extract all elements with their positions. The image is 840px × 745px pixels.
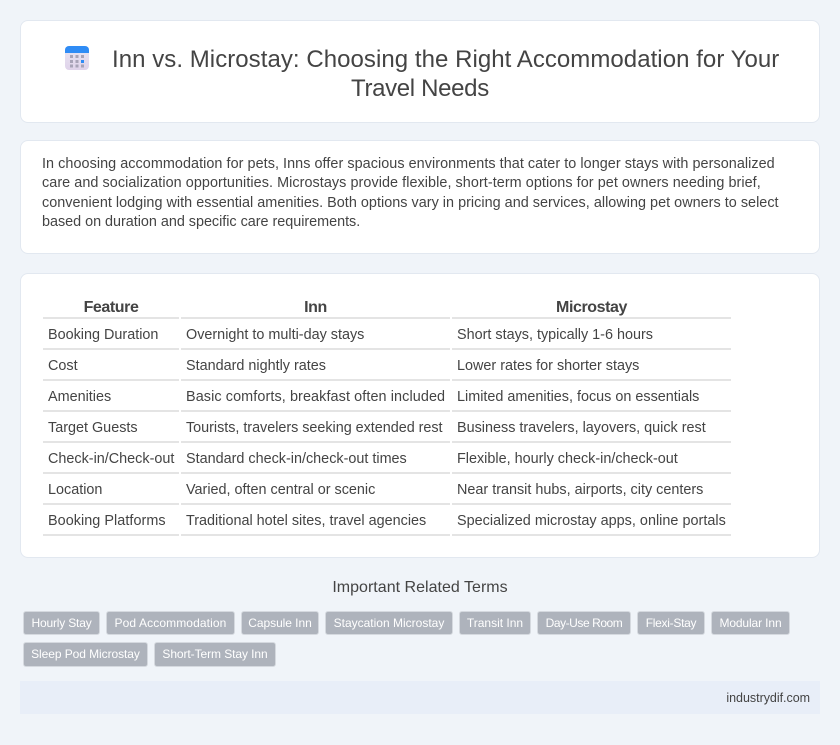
row: Check-in/Check-out: Check-in/Check-out bbox=[48, 451, 174, 467]
tag: Day-Use Room bbox=[537, 611, 631, 635]
tag: Staycation Microstay bbox=[325, 611, 453, 635]
row: Check-in/Check-out: Standard check-in/check-out times bbox=[186, 451, 407, 467]
row: Target Guests: Target Guests bbox=[48, 420, 138, 436]
row: Amenities bbox=[43, 389, 731, 412]
tag: Sleep Pod Microstay: Sleep Pod Microstay bbox=[31, 647, 140, 661]
text block: introduction: In choosing accommodation for pets, Inns offer spacious environments that cater to longer stays with personalized bbox=[42, 156, 775, 172]
panel: title header bbox=[20, 20, 820, 123]
row: Location bbox=[43, 482, 731, 505]
text block: introduction: convenient lodging with essential amenities. Both options vary in pricing and services, allowing pet owners to select bbox=[42, 195, 779, 211]
row: Target Guests: Tourists, travelers seeking extended rest bbox=[186, 420, 443, 436]
row: Amenities: Amenities bbox=[48, 389, 111, 405]
row: Check-in/Check-out: Flexible, hourly check-in/check-out bbox=[457, 451, 678, 467]
table header: Inn bbox=[304, 299, 327, 316]
row: Cost bbox=[43, 358, 731, 381]
tag: Short-Term Stay Inn bbox=[154, 642, 276, 667]
row: Cost: Lower rates for shorter stays bbox=[457, 358, 639, 374]
text block: introduction: care and socialization opportunities. Microstays provide flexible, short-term options for pet owners needing brief, bbox=[42, 175, 761, 191]
tag: Flexi-Stay: Flexi-Stay bbox=[646, 616, 696, 630]
row: Location: Near transit hubs, airports, city centers bbox=[457, 482, 703, 498]
tag: Sleep Pod Microstay bbox=[23, 642, 148, 667]
tag: Short-Term Stay Inn: Short-Term Stay Inn bbox=[162, 647, 268, 661]
comparison table bbox=[43, 299, 731, 536]
row: Amenities: Limited amenities, focus on essentials bbox=[457, 389, 699, 405]
row: Booking Platforms: Booking Platforms bbox=[48, 513, 166, 529]
table header: Feature bbox=[84, 299, 138, 316]
footer credit: industrydif.com bbox=[726, 691, 810, 705]
tag: Flexi-Stay bbox=[637, 611, 705, 635]
row: Booking Duration: Overnight to multi-day stays bbox=[186, 327, 364, 343]
tag: Capsule Inn bbox=[241, 611, 319, 635]
tag: Pod Accommodation: Pod Accommodation bbox=[115, 616, 226, 630]
tag: Hourly Stay bbox=[23, 611, 100, 635]
row: Target Guests: Business travelers, layovers, quick rest bbox=[457, 420, 706, 436]
table header bbox=[43, 299, 731, 319]
icon: calendar bbox=[65, 46, 89, 70]
tag: Transit Inn: Transit Inn bbox=[467, 616, 523, 630]
tag: Transit Inn bbox=[459, 611, 531, 635]
tag: Day-Use Room: Day-Use Room bbox=[546, 616, 622, 630]
text block: introduction: based on duration and specific care requirements. bbox=[42, 214, 360, 230]
table header: Microstay bbox=[556, 299, 627, 316]
row: Check-in/Check-out bbox=[43, 451, 731, 474]
title: Inn vs. Microstay: Choosing the Right Accommodation for Your bbox=[112, 46, 779, 73]
title bbox=[112, 46, 779, 102]
tag: Modular Inn: Modular Inn bbox=[719, 616, 782, 630]
row: Booking Platforms bbox=[43, 513, 731, 536]
tag: Pod Accommodation bbox=[106, 611, 235, 635]
row: Location: Location bbox=[48, 482, 102, 498]
row: Target Guests bbox=[43, 420, 731, 443]
row: Booking Duration: Short stays, typically 1-6 hours bbox=[457, 327, 653, 343]
heading: related terms: Important Related Terms bbox=[332, 579, 508, 596]
tag: Staycation Microstay: Staycation Microstay bbox=[334, 616, 444, 630]
row: Booking Platforms: Specialized microstay apps, online portals bbox=[457, 513, 726, 529]
tag: Hourly Stay: Hourly Stay bbox=[31, 616, 92, 630]
row: Amenities: Basic comforts, breakfast often included bbox=[186, 389, 445, 405]
row: Booking Duration bbox=[43, 327, 731, 350]
panel: introduction bbox=[20, 140, 820, 254]
tag: Modular Inn bbox=[711, 611, 790, 635]
panel: comparison table bbox=[20, 273, 820, 558]
row: Booking Platforms: Traditional hotel sites, travel agencies bbox=[186, 513, 426, 529]
row: Cost: Cost bbox=[48, 358, 78, 374]
row: Location: Varied, often central or scenic bbox=[186, 482, 375, 498]
footer bar bbox=[20, 681, 820, 714]
row: Booking Duration: Booking Duration bbox=[48, 327, 158, 343]
tag: Capsule Inn: Capsule Inn bbox=[248, 616, 312, 630]
text block: introduction bbox=[42, 156, 779, 230]
row: Cost: Standard nightly rates bbox=[186, 358, 326, 374]
title: Travel Needs bbox=[351, 75, 489, 102]
related term tags bbox=[23, 611, 790, 667]
